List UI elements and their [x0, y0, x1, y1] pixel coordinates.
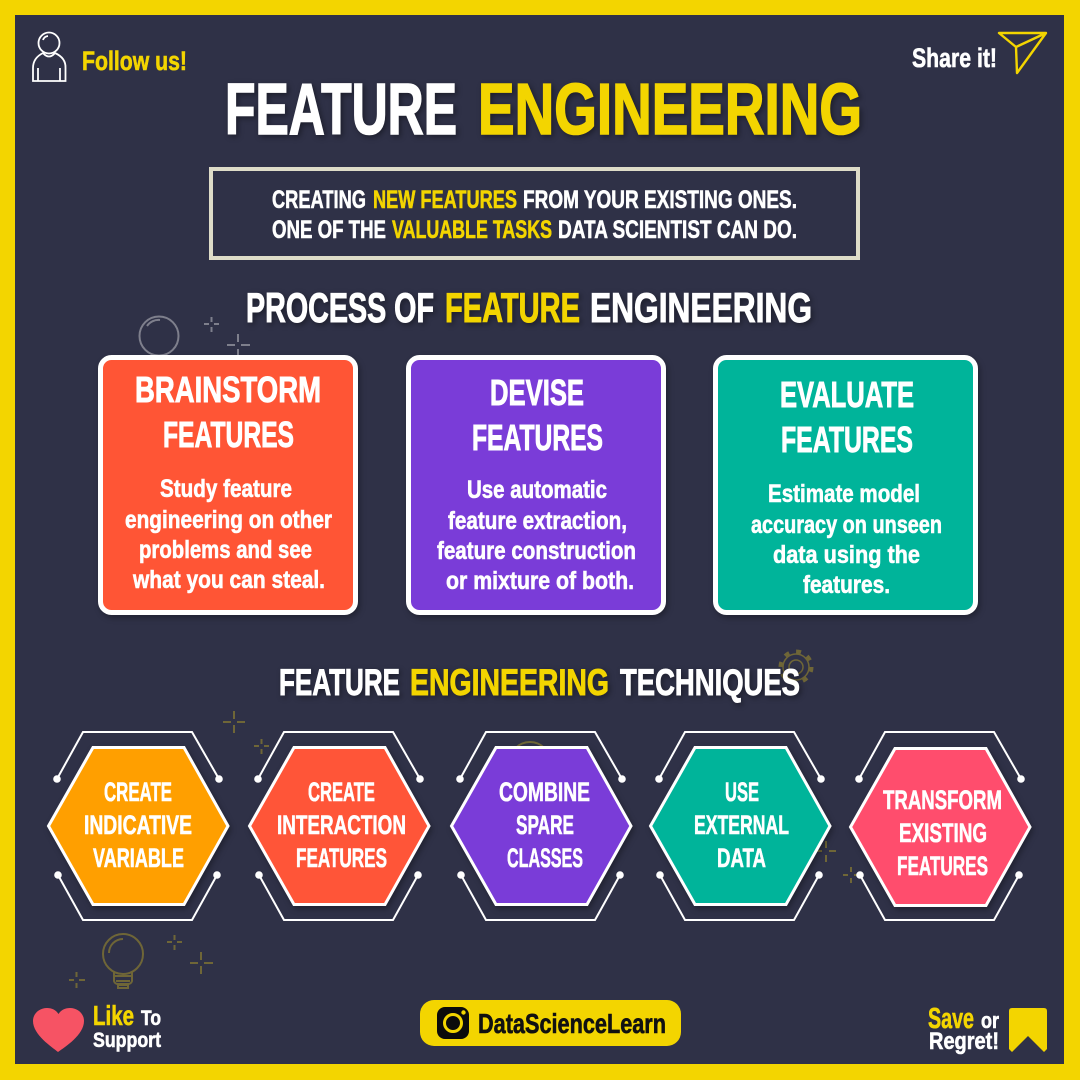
- panel: brainstorm features: [100, 358, 356, 612]
- like to support badge: Support: [93, 1029, 161, 1052]
- panel: devise features: feature extraction,: [448, 507, 627, 535]
- icon: heart: [33, 1008, 84, 1052]
- decorative background icons: [69, 316, 859, 988]
- like to support badge: To: [141, 1007, 161, 1030]
- like to support badge: [33, 1000, 161, 1052]
- instagram handle pill: [420, 1000, 681, 1046]
- panel: evaluate features: Estimate model: [768, 480, 920, 508]
- technique: create indicative variable: VARIABLE: [93, 843, 184, 873]
- save or regret badge: Save: [928, 1003, 974, 1035]
- technique: transform existing features: FEATURES: [897, 851, 988, 881]
- heading: process of feature engineering: FEATURE: [445, 284, 580, 331]
- technique: use external data: USE: [725, 777, 759, 807]
- technique: combine spare classes: SPARE: [516, 810, 574, 840]
- technique: use external data: DATA: [717, 843, 766, 873]
- panel: evaluate features: data using the: [773, 541, 920, 569]
- save or regret badge: Regret!: [929, 1028, 999, 1055]
- title: ENGINEERING: [478, 70, 862, 150]
- share it badge: Share it!: [912, 43, 997, 73]
- instagram handle pill: DataScienceLearn: [478, 1008, 666, 1039]
- icon: bookmark: [1009, 1008, 1047, 1052]
- panel: brainstorm features: BRAINSTORM: [135, 369, 321, 410]
- technique: combine spare classes: [452, 732, 631, 920]
- technique: create interaction features: FEATURES: [296, 843, 387, 873]
- heading: process of feature engineering: PROCESS OF: [246, 284, 434, 331]
- subtitle box: NEW FEATURES: [373, 186, 517, 214]
- panel: devise features: FEATURES: [472, 417, 603, 458]
- like to support badge: Like: [93, 1000, 134, 1031]
- technique: combine spare classes: CLASSES: [507, 843, 583, 873]
- save or regret badge: or: [981, 1008, 999, 1033]
- panel: evaluate features: accuracy on unseen: [751, 511, 942, 539]
- panel: devise features: Use automatic: [467, 476, 607, 504]
- subtitle box: [211, 169, 858, 258]
- technique: create indicative variable: [48, 732, 228, 920]
- icon: paper plane: [999, 33, 1046, 73]
- technique: create indicative variable: CREATE: [104, 777, 172, 807]
- panel: evaluate features: features.: [803, 571, 890, 599]
- technique: create interaction features: [250, 732, 429, 920]
- heading: process of feature engineering: [246, 284, 812, 331]
- panel: devise features: or mixture of both.: [446, 567, 634, 595]
- follow us badge: [33, 32, 187, 81]
- technique: transform existing features: [850, 732, 1030, 920]
- icon: person outline: [33, 32, 66, 81]
- technique: create interaction features: INTERACTION: [277, 810, 406, 840]
- technique: transform existing features: EXISTING: [899, 818, 987, 848]
- panel: brainstorm features: what you can steal.: [132, 566, 325, 594]
- heading: feature engineering techniques: ENGINEERING: [410, 662, 609, 703]
- panel: devise features: [408, 358, 664, 612]
- technique: create interaction features: CREATE: [308, 777, 375, 807]
- share it badge: [912, 33, 1046, 73]
- technique: combine spare classes: COMBINE: [499, 777, 590, 807]
- technique: use external data: EXTERNAL: [694, 810, 789, 840]
- panel: brainstorm features: problems and see: [139, 536, 312, 564]
- subtitle box: FROM YOUR EXISTING ONES.: [523, 186, 797, 214]
- heading: process of feature engineering: ENGINEERING: [590, 284, 812, 331]
- title: FEATURE: [225, 70, 457, 150]
- panel: devise features: DEVISE: [490, 372, 584, 413]
- technique: transform existing features: TRANSFORM: [883, 785, 1002, 815]
- save or regret badge: [928, 1003, 1047, 1055]
- technique: create indicative variable: INDICATIVE: [84, 810, 192, 840]
- technique: use external data: [650, 732, 830, 920]
- panel: brainstorm features: Study feature: [160, 475, 292, 503]
- subtitle box: ONE OF THE: [272, 216, 386, 244]
- heading: feature engineering techniques: TECHNIQUES: [620, 662, 800, 703]
- subtitle box: DATA SCIENTIST CAN DO.: [558, 216, 797, 244]
- follow us badge: Follow us!: [82, 46, 187, 76]
- title: [225, 70, 862, 150]
- heading: feature engineering techniques: FEATURE: [279, 662, 400, 703]
- panel: brainstorm features: FEATURES: [163, 414, 294, 455]
- icon: instagram: [437, 1007, 469, 1039]
- subtitle box: CREATING: [272, 186, 366, 214]
- panel: evaluate features: EVALUATE: [780, 374, 914, 415]
- panel: evaluate features: [716, 358, 976, 612]
- panel: evaluate features: FEATURES: [781, 419, 913, 460]
- panel: brainstorm features: engineering on other: [125, 506, 332, 534]
- heading: feature engineering techniques: [279, 662, 800, 703]
- panel: devise features: feature construction: [437, 537, 636, 565]
- subtitle box: VALUABLE TASKS: [392, 216, 552, 244]
